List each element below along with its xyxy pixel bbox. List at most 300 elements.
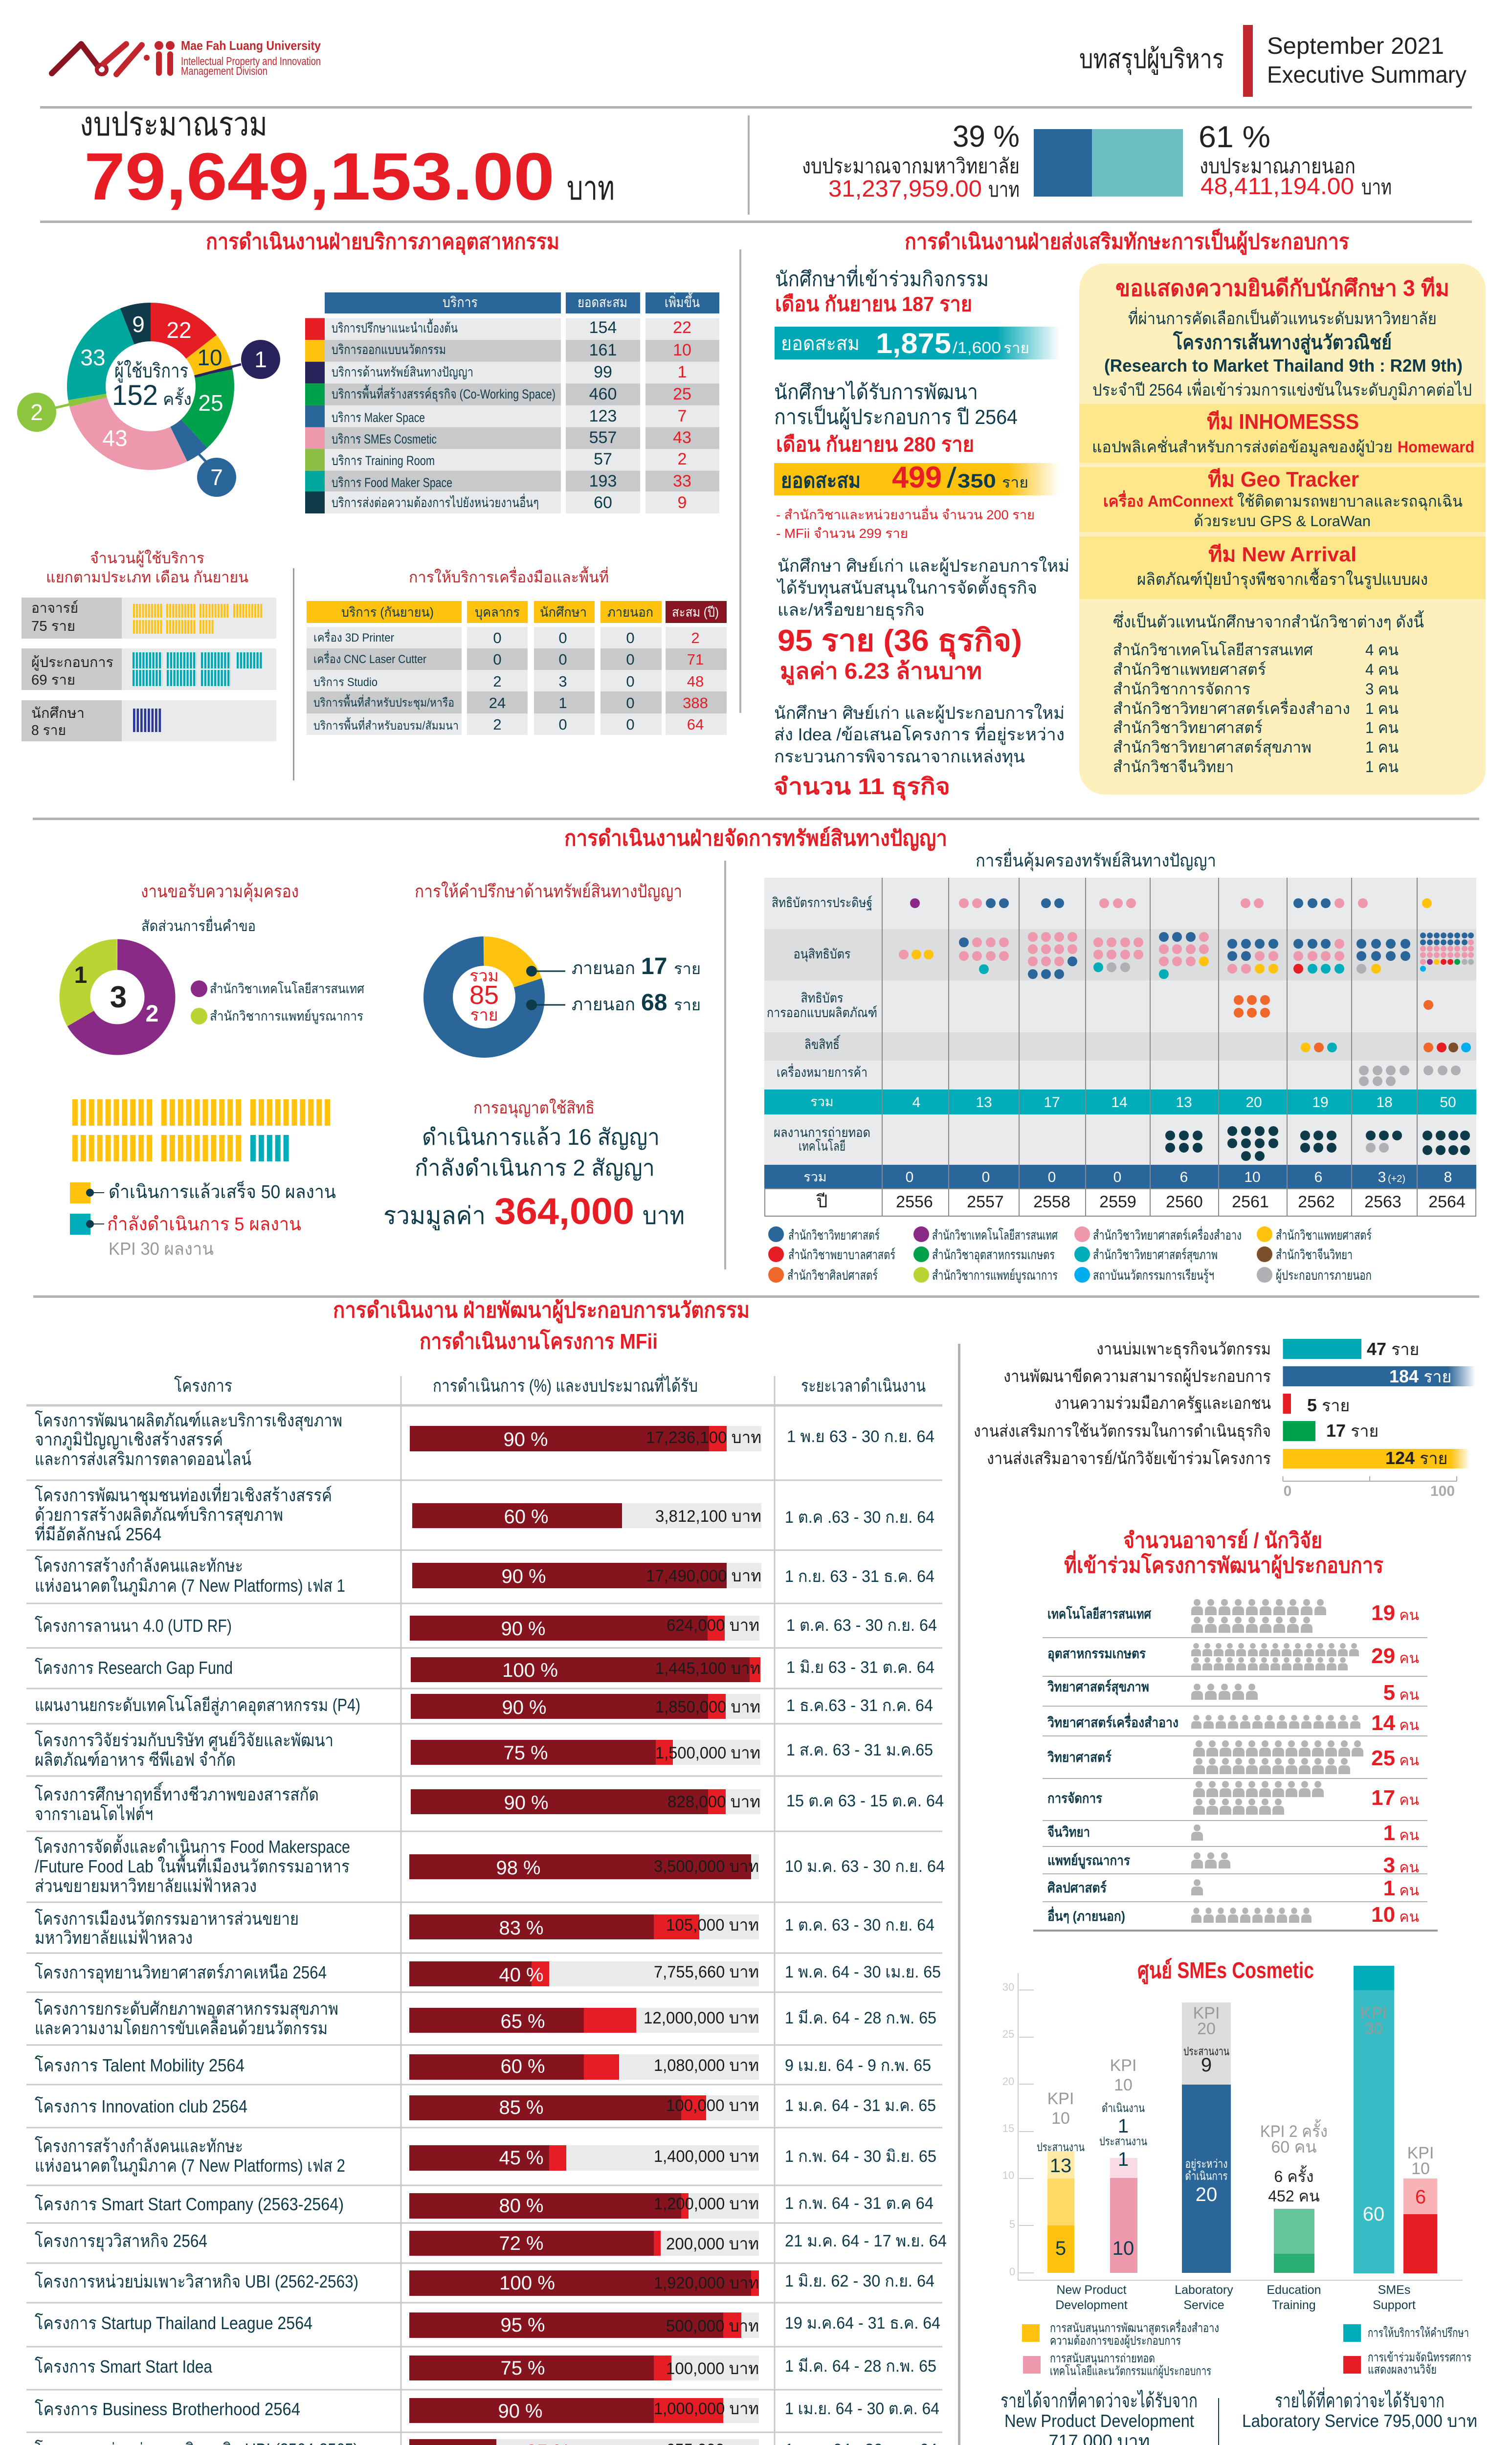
project row 2: 3,812,100 บาท: [655, 1507, 761, 1526]
project row 4: 624,000 บาท: [667, 1616, 759, 1635]
panel: IP consultation donut: ภายนอก: [572, 994, 635, 1014]
table: services: บริการ Maker Space: [332, 410, 425, 425]
legend: SMEs chart: แสดงผลงานวิจัย: [1368, 2363, 1437, 2377]
project row 1: [35, 1410, 934, 1469]
bar chart: SMEs Cosmetic: 20: [1196, 2184, 1217, 2205]
panel: IP filing table: 2560: [1166, 1193, 1203, 1211]
heading: entrepreneur skills: การดำเนินงานฝ่ายส่งเสริมทักษะการเป็นผู้ประกอบการ: [905, 228, 1349, 255]
panel: congratulations teams: สำนักวิชาวิทยาศาสตร์สุขภาพ: [1113, 738, 1312, 757]
table: services: 7: [678, 407, 687, 425]
header: executive summary title: September 2021: [1267, 33, 1444, 59]
project row 18: 1,920,000 บาท: [654, 2274, 759, 2292]
project row 13: 60 %: [501, 2056, 545, 2077]
panel: IP filing table: 2558: [1033, 1193, 1070, 1211]
table: services: 99: [594, 363, 612, 381]
bar chart: entrepreneur development counts: 124 ราย: [1385, 1448, 1447, 1468]
panel: protection requests donut: สำนักวิชาการแพทย์บูรณาการ: [210, 1008, 363, 1024]
table: MFii projects: [26, 1374, 949, 2445]
panel: SMEs income: รายได้จากที่คาดว่าจะได้รับจาก: [1001, 2387, 1198, 2412]
bar chart: SMEs Cosmetic: 10: [1112, 2238, 1134, 2259]
panel: IP filing table: 2556: [896, 1193, 933, 1211]
project row 18: [35, 2270, 934, 2296]
panel: researchers pictogram: วิทยาศาสตร์สุขภาพ: [1047, 1679, 1149, 1695]
project row 10: โครงการเมืองนวัตกรรมอาหารส่วนขยาย: [35, 1909, 299, 1929]
bar chart: entrepreneur development counts: งานความร่วมมือภาครัฐและเอกชน: [1054, 1394, 1271, 1413]
panel: researchers pictogram: อุตสาหกรรมเกษตร: [1047, 1646, 1146, 1662]
bar chart: SMEs Cosmetic: 1: [1118, 2149, 1129, 2170]
panel: congratulations teams: เครื่อง AmConnext: [1103, 490, 1233, 510]
panel: IP consultation donut: รวม: [469, 967, 499, 985]
panel: researchers pictogram: จำนวนอาจารย์ / นักวิจัย: [1123, 1528, 1322, 1553]
table: services: 460: [589, 385, 617, 403]
panel: congratulations teams: 1 คน: [1365, 719, 1399, 736]
panel: users by type: อาจารย์: [31, 600, 78, 616]
panel: protection requests donut: 2: [146, 1001, 158, 1027]
project row 3: 17,490,000 บาท: [646, 1567, 761, 1585]
panel: IP filing table: รวม: [810, 1094, 834, 1109]
project row 21: 1,000,000 บาท: [654, 2400, 759, 2418]
table: tools and space services: 64: [687, 716, 704, 733]
heading: innovation entrepreneur development: การดำเนินงาน ฝ่ายพัฒนาผู้ประกอบการนวัตกรรม: [333, 1298, 750, 1323]
bar chart: SMEs Cosmetic: 30: [1364, 2020, 1383, 2038]
project row 17: 72 %: [499, 2233, 544, 2254]
panel: licensing: 364,000: [494, 1191, 634, 1232]
table: tools and space services: 3: [558, 673, 567, 690]
project row 12: 12,000,000 บาท: [644, 2009, 759, 2027]
project row 14: [35, 2095, 936, 2120]
table: services: 43: [673, 428, 691, 447]
panel: IP filing table: 50: [1440, 1094, 1456, 1111]
panel: student activity stats: นักศึกษา ศิษย์เก่า และผู้ประกอบการใหม่: [774, 703, 1065, 723]
IP legend: สำนักวิชาวิทยาศาสตร์สุขภาพ: [1093, 1247, 1218, 1263]
bar chart: SMEs Cosmetic: 1: [1118, 2115, 1129, 2137]
panel: student activity stats: เดือน กันยายน 280 ราย: [776, 433, 974, 456]
panel: student activity stats: และ/หรือขยายธุรกิจ: [778, 600, 925, 620]
panel: IP filing table: 6: [1180, 1169, 1188, 1185]
panel: IP filing table: เทคโนโลยี: [799, 1139, 845, 1154]
panel: protection requests donut: 1: [74, 962, 87, 988]
panel: SMEs income: Laboratory Service 795,000 บาท: [1242, 2411, 1477, 2431]
panel: student activity stats: กระบวนการพิจารณาจากแหล่งทุน: [774, 747, 1025, 767]
table: tools and space services: 48: [687, 673, 704, 690]
table: services: ยอดสะสม: [578, 295, 627, 311]
IP dots: [899, 898, 1474, 1161]
project row 16: โครงการ Smart Start Company (2563-2564): [35, 2194, 344, 2214]
project row 3: [35, 1556, 934, 1597]
panel: IP filing table: 2563: [1364, 1193, 1401, 1211]
project row 9: โครงการจัดตั้งและดำเนินการ Food Makerspace: [35, 1834, 350, 1857]
project row 6: 1 ธ.ค.63 - 31 ก.ค. 64: [786, 1696, 933, 1715]
panel: congratulations teams: ประจำปี 2564 เพื่อเข้าร่วมการแข่งขันในระดับภูมิภาคต่อไป: [1092, 378, 1472, 400]
panel: IP filing table: 0: [906, 1169, 913, 1185]
legend: SMEs chart: เทคโนโลยีและนวัตกรรมแก่ผู้ประกอบการ: [1050, 2364, 1211, 2378]
project row 10: 105,000 บาท: [666, 1916, 759, 1934]
bar chart: SMEs Cosmetic: KPI 2 ครั้ง: [1260, 2119, 1328, 2141]
panel: researchers pictogram: [1033, 1528, 1438, 1931]
project row 13: 1,080,000 บาท: [654, 2056, 759, 2075]
panel: student activity stats: นักศึกษาได้รับการพัฒนา: [774, 380, 978, 403]
bar chart: SMEs Cosmetic: 13: [1050, 2155, 1071, 2177]
bar chart: SMEs Cosmetic: ประสานงาน: [1037, 2141, 1085, 2154]
table: services: 25: [673, 385, 691, 403]
panel: IP filing table: 18: [1376, 1094, 1393, 1111]
panel: congratulations teams: สำนักวิชาวิทยาศาสตร์เครื่องสำอาง: [1113, 698, 1350, 717]
panel: IP filing table: อนุสิทธิบัตร: [793, 947, 851, 962]
project row 12: [35, 1999, 936, 2038]
table: tools and space services: 2: [691, 629, 700, 646]
table: services: 161: [589, 341, 617, 359]
bar chart: entrepreneur development counts: งานพัฒนาขีดความสามารถผู้ประกอบการ: [1003, 1367, 1271, 1386]
table: tools and space services: เครื่อง CNC Laser Cutter: [313, 651, 426, 666]
panel: congratulations teams: ทีม Geo Tracker: [1208, 467, 1359, 491]
panel: IP filing table: 0: [1048, 1169, 1056, 1185]
panel: SMEs income: รายได้ที่คาดว่าจะได้รับจาก: [1275, 2387, 1445, 2412]
table: services: บริการพื้นที่สร้างสรรค์ธุรกิจ (Co-Working Space): [332, 384, 556, 402]
project row 4: โครงการลานนา 4.0 (UTD RF): [35, 1616, 232, 1636]
project row 15: โครงการสร้างกำลังคนและทักษะ: [35, 2136, 243, 2156]
table: services: 22: [673, 318, 691, 337]
IP legend: สำนักวิชาการแพทย์บูรณาการ: [932, 1267, 1058, 1283]
bar chart: entrepreneur development counts: [974, 1339, 1475, 1499]
project row 18: 1 มิ.ย. 62 - 30 ก.ย. 64: [785, 2272, 934, 2290]
panel: student activity stats: นักศึกษาที่เข้าร่วมกิจกรรม: [775, 265, 989, 290]
panel: users by type: ผู้ประกอบการ: [31, 655, 113, 671]
table: tools and space services: 2: [493, 673, 502, 690]
table: tools and space services: [307, 566, 727, 735]
panel: researchers pictogram: 17 คน: [1371, 1786, 1419, 1810]
project row 6: 1,850,000 บาท: [655, 1698, 760, 1716]
project row 20: 1 มี.ค. 64 - 28 ก.พ. 65: [785, 2357, 936, 2376]
panel: congratulations teams: ทีม New Arrival: [1208, 543, 1356, 566]
project row 8: 15 ต.ค 63 - 15 ต.ค. 64: [786, 1792, 944, 1810]
panel: student activity stats: ราย: [1003, 340, 1029, 356]
project row 17: 200,000 บาท: [666, 2235, 759, 2253]
table: services: 2: [678, 450, 687, 468]
project row 6: [35, 1694, 933, 1719]
bar chart: SMEs Cosmetic: 6: [1415, 2186, 1426, 2208]
project row 2: [35, 1483, 934, 1544]
bar chart: SMEs Cosmetic: 10: [1002, 2169, 1014, 2181]
bar chart: entrepreneur development counts: 5 ราย: [1307, 1395, 1350, 1415]
bar chart: entrepreneur development counts: 0: [1284, 1483, 1291, 1499]
bar chart: SMEs Cosmetic: KPI: [1110, 2056, 1136, 2075]
panel: total budget: [80, 106, 750, 215]
bar chart: SMEs Cosmetic: ประสานงาน: [1099, 2135, 1147, 2148]
panel: IP filing table: 0: [1113, 1169, 1121, 1185]
panel: total budget: 79,649,153.00: [84, 139, 555, 214]
project row 13: [35, 2054, 931, 2080]
panel: student activity stats: ยอดสะสม: [781, 333, 860, 355]
bar chart: SMEs Cosmetic: 10: [1051, 2109, 1070, 2128]
panel: IP consultation donut: ราย: [470, 1006, 498, 1024]
table: services: 193: [589, 472, 617, 490]
table: services: บริการ Training Room: [332, 453, 435, 468]
table: tools and space services: บริการพื้นที่สำหรับประชุม/หารือ: [313, 694, 454, 710]
project row 21: [35, 2398, 939, 2423]
panel: IP consultation donut: ภายนอก: [572, 958, 635, 978]
panel: researchers pictogram: ศิลปศาสตร์: [1047, 1880, 1107, 1895]
panel: IP filing table: 4: [912, 1094, 920, 1111]
panel: congratulations teams: 1 คน: [1365, 738, 1399, 756]
project row 2: 1 ต.ค .63 - 30 ก.ย. 64: [785, 1508, 934, 1527]
project row 14: 85 %: [499, 2097, 544, 2118]
bar chart: SMEs Cosmetic: [1002, 1966, 1471, 2378]
panel: congratulations teams: 1 คน: [1365, 700, 1399, 717]
panel: student activity stats: - สำนักวิชาและหน่วยงานอื่น จำนวน 200 ราย: [776, 506, 1035, 522]
panel: student activity stats: [774, 265, 1069, 800]
project row 8: โครงการศึกษาฤทธิ์ทางชีวภาพของสารสกัด: [35, 1781, 319, 1804]
bar chart: entrepreneur development counts: 100: [1430, 1483, 1455, 1499]
panel: researchers pictogram: 29 คน: [1371, 1644, 1419, 1668]
project row 3: แห่งอนาคตในภูมิภาค (7 New Platforms) เฟส 1: [35, 1576, 345, 1597]
table: tools and space services: 0: [626, 716, 635, 733]
project row 22: [35, 2439, 937, 2445]
table: tools and space services: บริการ (กันยายน): [341, 605, 434, 620]
panel: student activity stats: มูลค่า 6.23 ล้านบาท: [780, 658, 982, 685]
project row 9: 98 %: [496, 1857, 541, 1879]
panel: student activity stats: - MFii จำนวน 299 ราย: [776, 526, 908, 541]
donut chart: service users: 1: [254, 347, 267, 372]
panel: IP filing table: 14: [1111, 1094, 1128, 1111]
panel: budget split: งบประมาณภายนอก: [1200, 155, 1356, 178]
panel: student activity stats: /1,600: [953, 339, 1001, 356]
project row 1: 17,236,100 บาท: [646, 1428, 761, 1447]
panel: IP filing table: 8: [1444, 1169, 1452, 1185]
project row 20: [35, 2356, 936, 2380]
table: tools and space services: การให้บริการเครื่องมือและพื้นที่: [409, 566, 609, 586]
project row 16: 80 %: [499, 2195, 544, 2217]
panel: congratulations teams: ด้วยระบบ GPS & LoraWan: [1194, 512, 1371, 530]
panel: researchers pictogram: 19 คน: [1371, 1601, 1419, 1625]
panel: total budget: บาท: [567, 170, 615, 207]
IP legend: สำนักวิชาจีนวิทยา: [1276, 1247, 1353, 1262]
logo: Mae Fah Luang University MFii: Management Division: [181, 65, 267, 77]
header: executive summary title: Executive Summary: [1267, 62, 1467, 88]
bar chart: SMEs Cosmetic: 60: [1363, 2203, 1384, 2225]
project row 10: [35, 1909, 934, 1948]
table: tools and space services: 2: [493, 716, 502, 733]
panel: congratulations teams: 3 คน: [1365, 680, 1399, 698]
panel: SMEs income: New Product Development: [1004, 2411, 1194, 2431]
project row 20: 100,000 บาท: [666, 2359, 759, 2378]
project row 21: 1 เม.ย. 64 - 30 ต.ค. 64: [785, 2400, 939, 2418]
bar chart: SMEs Cosmetic: ดำเนินการ: [1185, 2170, 1228, 2183]
bar chart: SMEs Cosmetic: ดำเนินงาน: [1102, 2102, 1145, 2115]
bar chart: SMEs Cosmetic: 10: [1114, 2076, 1133, 2094]
panel: IP filing table: 0: [982, 1169, 990, 1185]
IP legend: ผู้ประกอบการภายนอก: [1276, 1268, 1372, 1283]
panel: IP works pictogram: กำลังดำเนินการ 5 ผลงาน: [107, 1214, 301, 1235]
donut chart: service users: 10: [197, 345, 222, 370]
project row 11: 40 %: [499, 1964, 544, 1986]
table: services: 9: [678, 493, 687, 512]
panel: users by type: 69 ราย: [31, 672, 75, 688]
table: MFii projects: โครงการ: [174, 1376, 232, 1396]
table: services: 1: [678, 363, 687, 381]
panel: budget split: บาท: [1361, 176, 1392, 199]
project row 14: 100,000 บาท: [666, 2096, 759, 2115]
project row 3: 1 ก.ย. 63 - 31 ธ.ค. 64: [785, 1567, 934, 1586]
project row 3: โครงการสร้างกำลังคนและทักษะ: [35, 1556, 243, 1576]
panel: student activity stats: จำนวน 11 ธุรกิจ: [774, 774, 950, 800]
panel: congratulations teams: ผลิตภัณฑ์ปุ๋ยบำรุงพืชจากเชื้อราในรูปแบบผง: [1137, 568, 1428, 589]
IP legend: สำนักวิชาอุตสาหกรรมเกษตร: [932, 1247, 1055, 1263]
table: services: 60: [594, 493, 612, 512]
project row 15: แห่งอนาคตในภูมิภาค (7 New Platforms) เฟส 2: [35, 2156, 345, 2177]
panel: IP filing table: 2564: [1428, 1193, 1466, 1211]
IP legend: [768, 1226, 1372, 1283]
panel: licensing: บาท: [643, 1202, 685, 1229]
panel: student activity stats: ยอดสะสม: [781, 469, 861, 492]
project row 15: [35, 2136, 936, 2177]
donut chart: service users: 152: [112, 379, 158, 411]
project row 2: 60 %: [504, 1506, 549, 1528]
panel: congratulations teams: ที่ผ่านการคัดเลือกเป็นตัวแทนระดับมหาวิทยาลัย: [1128, 307, 1437, 328]
table: services: บริการปรึกษาแนะนำเบื้องต้น: [332, 318, 458, 335]
panel: congratulations teams: Homeward: [1398, 438, 1474, 456]
project row 9: ส่วนขยายมหาวิทยาลัยแม่ฟ้าหลวง: [35, 1876, 257, 1896]
project row 2: ที่มีอัตลักษณ์ 2564: [35, 1522, 161, 1544]
table: tools and space services: 0: [558, 651, 567, 668]
panel: IP consultation donut: ราย: [674, 996, 701, 1014]
IP legend: สำนักวิชาแพทยศาสตร์: [1276, 1227, 1372, 1243]
bar chart: SMEs Cosmetic: 20: [1002, 2075, 1014, 2088]
table: services: [305, 292, 719, 513]
table: services: 123: [589, 407, 617, 425]
panel: budget split: [802, 120, 1392, 202]
bar chart: SMEs Cosmetic: 10: [1411, 2159, 1430, 2178]
table: services: 154: [589, 318, 617, 337]
project row 8: [35, 1781, 944, 1824]
project row 14: โครงการ Innovation club 2564: [35, 2096, 247, 2116]
table: tools and space services: บริการพื้นที่สำหรับอบรม/สัมมนา: [313, 717, 459, 733]
table: tools and space services: 1: [558, 694, 567, 711]
project row 5: 1 มิ.ย 63 - 31 ต.ค. 64: [786, 1658, 934, 1677]
panel: protection requests donut: สัดส่วนการยื่นคำขอ: [141, 916, 256, 934]
panel: IP works pictogram: [70, 1099, 336, 1259]
panel: congratulations teams: สำนักวิชาการจัดการ: [1113, 680, 1250, 698]
panel: student activity stats: การเป็นผู้ประกอบการ ปี 2564: [774, 405, 1018, 429]
bar chart: SMEs Cosmetic: 60 คน: [1271, 2138, 1317, 2156]
bar chart: SMEs Cosmetic: 30: [1002, 1981, 1014, 1993]
panel: users by type: แยกตามประเภท เดือน กันยายน: [46, 569, 248, 586]
panel: researchers pictogram: 14 คน: [1371, 1711, 1419, 1735]
project row 1: 90 %: [504, 1429, 548, 1450]
project row 9: /Future Food Lab ในพื้นที่เมืองนวัตกรรมอาหาร: [35, 1853, 350, 1876]
panel: IP filing table: 2561: [1232, 1193, 1269, 1211]
panel: student activity stats: เดือน กันยายน 187 ราย: [775, 292, 972, 315]
bar chart: SMEs Cosmetic: 20: [1197, 2020, 1216, 2038]
project row 4: [35, 1616, 937, 1641]
project row 10: 1 ต.ค. 63 - 30 ก.ย. 64: [785, 1916, 934, 1934]
panel: student activity stats: 1,875: [876, 328, 951, 359]
IP legend: สำนักวิชาวิทยาศาสตร์เครื่องสำอาง: [1093, 1226, 1242, 1243]
panel: licensing: ดำเนินการแล้ว 16 สัญญา: [422, 1124, 660, 1150]
project row 5: โครงการ Research Gap Fund: [35, 1658, 233, 1678]
project row 3: 90 %: [502, 1566, 546, 1587]
project row 12: และความงามโดยการขับเคลื่อนด้วยนวัตกรรม: [35, 2016, 328, 2038]
table: services: บริการออกแบบนวัตกรรม: [332, 342, 446, 357]
panel: IP filing table: 17: [1044, 1094, 1060, 1111]
bar chart: SMEs Cosmetic: Laboratory: [1175, 2283, 1233, 2297]
panel: IP filing table: 19: [1312, 1094, 1329, 1111]
logo: Mae Fah Luang University MFii: Intellectual Property and Innovation: [181, 55, 321, 67]
project row 19: โครงการ Startup Thailand League 2564: [35, 2313, 312, 2333]
heading: intellectual property: การดำเนินงานฝ่ายจัดการทรัพย์สินทางปัญญา: [564, 826, 947, 851]
panel: student activity stats: ได้รับทุนสนับสนุนในการจัดตั้งธุรกิจ: [776, 575, 1037, 598]
project row 20: โครงการ Smart Start Idea: [35, 2356, 213, 2377]
bar chart: SMEs Cosmetic: 0: [1009, 2266, 1015, 2278]
project row 7: 75 %: [504, 1742, 548, 1764]
bar chart: SMEs Cosmetic: 6 ครั้ง: [1274, 2165, 1313, 2185]
legend: SMEs chart: การให้บริการให้คำปรึกษา: [1368, 2326, 1469, 2340]
heading: SMEs Cosmetic: ศูนย์ SMEs Cosmetic: [1137, 1957, 1314, 1984]
panel: IP filing table: 2559: [1099, 1193, 1136, 1211]
heading: innovation entrepreneur development: [333, 1298, 750, 1354]
panel: student activity stats: 95 ราย (36 ธุรกิจ): [778, 624, 1022, 659]
panel: protection requests donut: [74, 881, 364, 1040]
donut chart: service users: ผู้ใช้บริการ: [114, 359, 188, 382]
panel: IP filing table: สิทธิบัตรการประดิษฐ์: [772, 895, 872, 911]
project row 6: แผนงานยกระดับเทคโนโลยีสู่ภาคอุตสาหกรรม (P4): [35, 1695, 360, 1716]
panel: users by type: 8 ราย: [31, 723, 66, 738]
table: MFii projects: การดำเนินการ (%) และงบประมาณที่ได้รับ: [433, 1374, 698, 1396]
project row 15: 1 ก.พ. 64 - 30 มิ.ย. 65: [785, 2147, 936, 2166]
panel: IP filing table: สิทธิบัตร: [801, 991, 843, 1005]
project row 18: 100 %: [499, 2272, 555, 2294]
table: tools and space services: 24: [489, 694, 506, 711]
panel: researchers pictogram: 5 คน: [1383, 1681, 1419, 1705]
panel: IP filing table: การออกแบบผลิตภัณฑ์: [767, 1005, 877, 1020]
panel: congratulations teams: 1 คน: [1365, 758, 1399, 776]
panel: researchers pictogram: ที่เข้าร่วมโครงการพัฒนาผู้ประกอบการ: [1064, 1550, 1383, 1578]
table: services: บริการ Food Maker Space: [332, 475, 452, 490]
panel: IP filing table: 20: [1245, 1094, 1262, 1111]
donut chart: service users: 2: [30, 400, 43, 425]
donut chart: service users: ครั้ง: [163, 387, 192, 409]
project row 12: โครงการยกระดับศักยภาพอุตสาหกรรมสุขภาพ: [35, 1999, 338, 2020]
panel: total budget: งบประมาณรวม: [80, 106, 267, 143]
panel: congratulations teams: 4 คน: [1365, 661, 1399, 678]
panel: IP consultation donut: 85: [469, 980, 499, 1010]
project row 16: 1,200,000 บาท: [654, 2195, 759, 2213]
panel: congratulations teams: [1079, 264, 1486, 795]
bar chart: entrepreneur development counts: 184 ราย: [1389, 1366, 1451, 1386]
legend: SMEs chart: การเข้าร่วมจัดนิทรรศการ: [1368, 2351, 1471, 2364]
project row 21: โครงการ Business Brotherhood 2564: [35, 2399, 300, 2419]
panel: SMEs income: [987, 2387, 1477, 2445]
project row 5: 1,445,100 บาท: [655, 1659, 760, 1678]
project row 19: 95 %: [501, 2314, 545, 2336]
panel: IP filing table: รวม: [803, 1170, 827, 1184]
bar chart: SMEs Cosmetic: Support: [1373, 2298, 1416, 2312]
table: tools and space services: 71: [687, 651, 704, 668]
panel: student activity stats: นักศึกษา ศิษย์เก่า และผู้ประกอบการใหม่: [778, 556, 1069, 576]
table: tools and space services: 0: [493, 651, 502, 668]
panel: budget split: 61 %: [1199, 120, 1270, 154]
donut chart: service users: 7: [210, 465, 223, 490]
IP legend: สำนักวิชาพยาบาลศาสตร์: [788, 1247, 895, 1262]
panel: IP filing table: (+2): [1388, 1174, 1405, 1184]
bar chart: SMEs Cosmetic: KPI: [1360, 2004, 1387, 2023]
panel: congratulations teams: ซึ่งเป็นตัวแทนนักศึกษาจากสำนักวิชาต่างๆ ดังนี้: [1113, 610, 1424, 631]
panel: student activity stats: /: [947, 462, 957, 494]
bar chart: SMEs Cosmetic: 25: [1002, 2028, 1014, 2040]
panel: student activity stats: ราย: [1002, 475, 1028, 491]
panel: researchers pictogram: วิทยาศาสตร์: [1047, 1750, 1112, 1765]
panel: IP filing table: 2562: [1298, 1193, 1335, 1211]
panel: IP works pictogram: ดำเนินการแล้วเสร็จ 50 ผลงาน: [109, 1180, 336, 1202]
